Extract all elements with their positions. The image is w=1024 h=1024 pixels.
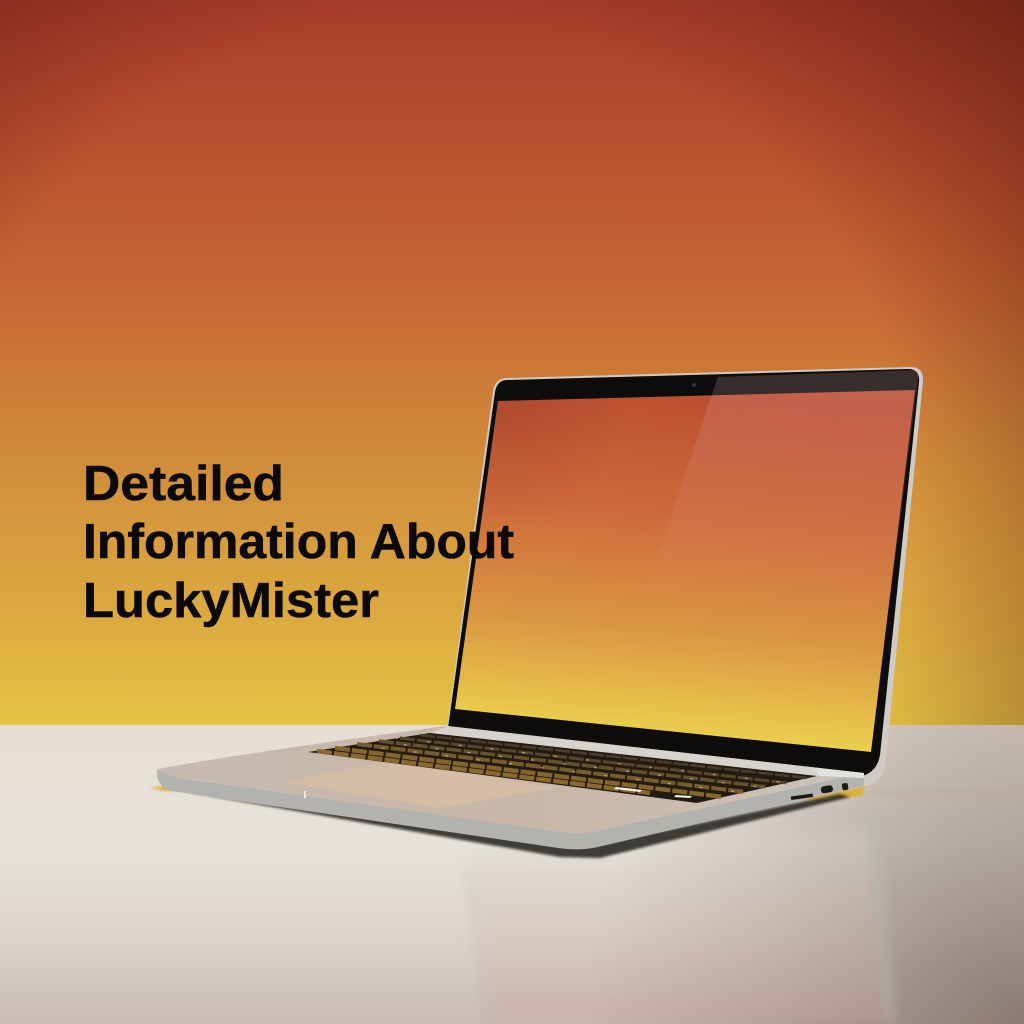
background wall xyxy=(0,0,1024,726)
laptop screen xyxy=(455,390,915,752)
keyboard xyxy=(308,733,817,803)
table surface xyxy=(0,725,1024,1024)
title: Detailed xyxy=(83,457,284,511)
trackpad xyxy=(280,760,555,808)
laptop lid xyxy=(447,367,923,786)
title: Information About xyxy=(83,515,514,569)
laptop base xyxy=(157,726,864,849)
ports xyxy=(791,783,849,800)
title: LuckyMister xyxy=(83,574,379,628)
spacebar highlights xyxy=(614,787,642,792)
title xyxy=(83,457,514,628)
webcam xyxy=(692,383,696,387)
base notch highlight xyxy=(304,791,306,798)
screen corner shading xyxy=(455,390,915,752)
laptop xyxy=(150,367,923,858)
yellow table reflections xyxy=(150,785,865,800)
screen glare xyxy=(636,370,919,620)
laptop shadow xyxy=(175,790,850,858)
